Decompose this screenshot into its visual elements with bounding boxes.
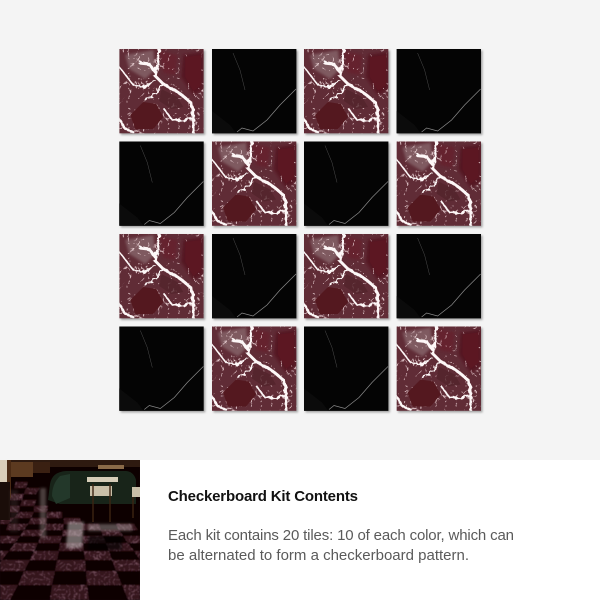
description [168, 527, 514, 564]
description: be alternated to form a checkerboard pattern. [168, 547, 469, 564]
description: Each kit contains 20 tiles: 10 of each color, which can [168, 527, 514, 544]
heading: Checkerboard Kit Contents [168, 488, 358, 505]
tile row 2 [119, 142, 483, 227]
tile row 3 [119, 234, 483, 320]
tile row 1 [119, 49, 483, 135]
tile grid [119, 49, 484, 414]
tile row 4 [119, 326, 483, 412]
floor [0, 481, 140, 600]
photo: checkerboard floor in a lounge [0, 460, 140, 600]
